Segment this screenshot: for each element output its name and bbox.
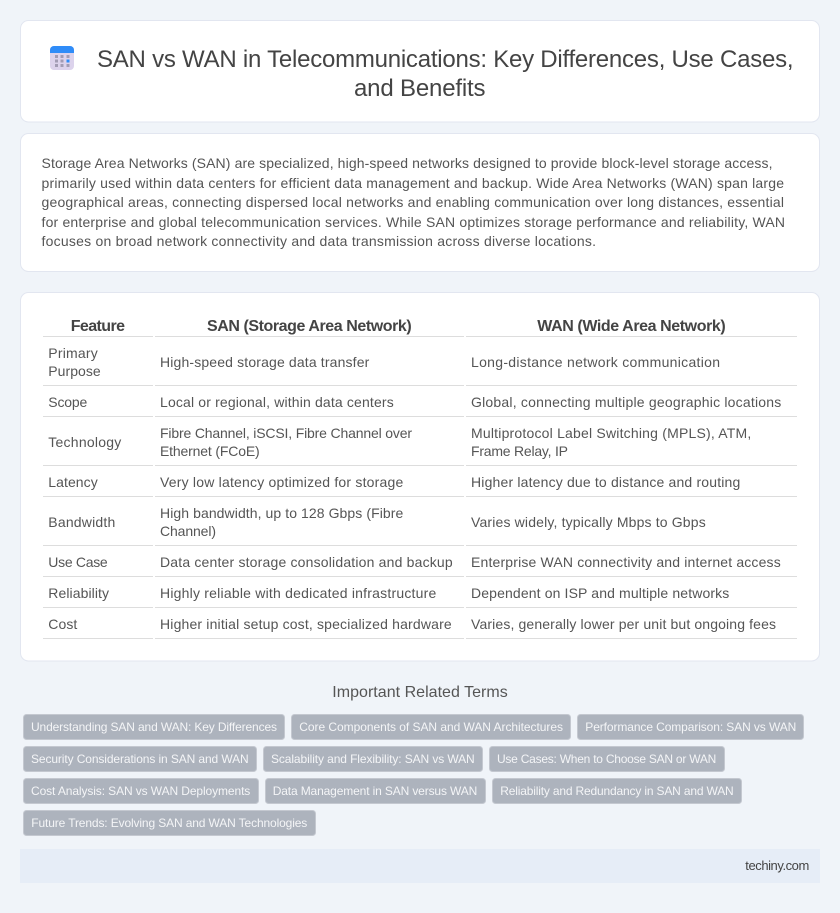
row: scope: Global, connecting multiple geographic locations bbox=[471, 394, 781, 410]
row: technology bbox=[48, 425, 751, 459]
row: latency: Higher latency due to distance and routing bbox=[471, 474, 740, 490]
tag: Scalability and Flexibility: SAN vs WAN bbox=[271, 752, 475, 766]
row: scope bbox=[48, 394, 781, 410]
row: cost bbox=[48, 616, 776, 632]
text block: introduction bbox=[42, 155, 785, 249]
text block: introduction: geographical areas, connecting dispersed local networks and enabling communication over long distances, essential bbox=[42, 194, 784, 210]
tag bbox=[24, 810, 316, 836]
tag bbox=[492, 778, 742, 804]
tag: Security Considerations in SAN and WAN bbox=[31, 752, 249, 766]
row: technology: Ethernet (FCoE) bbox=[160, 443, 260, 459]
row: technology: Multiprotocol Label Switching (MPLS), ATM, bbox=[471, 425, 751, 441]
tag bbox=[24, 778, 258, 804]
row: reliability: Highly reliable with dedicated infrastructure bbox=[160, 585, 437, 601]
row: reliability: Reliability bbox=[48, 585, 109, 601]
tag bbox=[266, 778, 486, 804]
row: technology: Frame Relay, IP bbox=[471, 443, 568, 459]
table header row: Feature bbox=[71, 318, 125, 335]
panel: title header bbox=[20, 20, 820, 122]
tag bbox=[24, 714, 284, 740]
row: scope: Scope bbox=[48, 394, 88, 410]
row: cost: Cost bbox=[48, 616, 77, 632]
row: primary purpose: High-speed storage data transfer bbox=[160, 354, 370, 370]
tag bbox=[24, 746, 256, 772]
row: use case bbox=[48, 554, 781, 570]
panel: related term tags bbox=[24, 714, 804, 836]
text block: introduction: for enterprise and global telecommunication services. While SAN optimizes storage performance and reliability, WAN bbox=[42, 214, 785, 230]
row: scope: Local or regional, within data centers bbox=[160, 394, 394, 410]
row: bandwidth: High bandwidth, up to 128 Gbps (Fibre bbox=[160, 505, 404, 521]
tag: Cost Analysis: SAN vs WAN Deployments bbox=[31, 784, 250, 798]
table header row: WAN (Wide Area Network) bbox=[537, 318, 726, 335]
row: bandwidth: Channel) bbox=[160, 523, 216, 539]
table header row: SAN (Storage Area Network) bbox=[207, 318, 412, 335]
tag: Data Management in SAN versus WAN bbox=[273, 784, 477, 798]
row: reliability: Dependent on ISP and multiple networks bbox=[471, 585, 729, 601]
row: use case: Use Case bbox=[48, 554, 108, 570]
row: primary purpose: Long-distance network communication bbox=[471, 354, 720, 370]
row: bandwidth: Varies widely, typically Mbps to Gbps bbox=[471, 514, 706, 530]
text block: introduction: primarily used within data centers for efficient data management and backup. Wide Area Networks (WAN) span large bbox=[42, 175, 784, 191]
tag bbox=[264, 746, 482, 772]
row: cost: Higher initial setup cost, specialized hardware bbox=[160, 616, 452, 632]
tag bbox=[490, 746, 724, 772]
row: use case: Data center storage consolidation and backup bbox=[160, 554, 453, 570]
tag: Understanding SAN and WAN: Key Differences bbox=[31, 720, 277, 734]
tag: Core Components of SAN and WAN Architectures bbox=[299, 720, 563, 734]
table header row bbox=[71, 318, 726, 335]
row: latency bbox=[48, 474, 740, 490]
row: use case: Enterprise WAN connectivity and internet access bbox=[471, 554, 781, 570]
tag: Performance Comparison: SAN vs WAN bbox=[585, 720, 796, 734]
row: latency: Very low latency optimized for storage bbox=[160, 474, 404, 490]
tag bbox=[578, 714, 804, 740]
row: primary purpose: Purpose bbox=[48, 363, 101, 379]
panel: comparison table bbox=[20, 292, 820, 661]
tag: Reliability and Redundancy in SAN and WAN bbox=[500, 784, 734, 798]
row: latency: Latency bbox=[48, 474, 98, 490]
row: technology: Technology bbox=[48, 434, 121, 450]
row: primary purpose: Primary bbox=[48, 345, 98, 361]
title: and Benefits bbox=[354, 75, 486, 102]
text block: introduction: Storage Area Networks (SAN) are specialized, high-speed networks designed to provide block-level storage access, bbox=[42, 155, 772, 171]
panel: introduction text bbox=[20, 134, 820, 272]
row: reliability bbox=[48, 585, 729, 601]
tag bbox=[292, 714, 570, 740]
tag: Use Cases: When to Choose SAN or WAN bbox=[497, 752, 716, 766]
title: SAN vs WAN in Telecommunications: Key Differences, Use Cases, bbox=[97, 46, 794, 73]
title bbox=[97, 46, 794, 102]
footer bbox=[20, 849, 820, 883]
row: bandwidth bbox=[48, 505, 706, 539]
text block: introduction: focuses on broad network connectivity and data transmission across diverse locations. bbox=[42, 233, 596, 249]
row: primary purpose bbox=[48, 345, 720, 379]
tag: Future Trends: Evolving SAN and WAN Technologies bbox=[31, 816, 307, 830]
row: technology: Fibre Channel, iSCSI, Fibre Channel over bbox=[160, 425, 412, 441]
heading: important related terms: Important Related Terms bbox=[332, 684, 508, 701]
icon: calendar bbox=[50, 46, 74, 70]
footer: techiny.com bbox=[745, 858, 809, 873]
row: bandwidth: Bandwidth bbox=[48, 514, 115, 530]
row: cost: Varies, generally lower per unit but ongoing fees bbox=[471, 616, 776, 632]
